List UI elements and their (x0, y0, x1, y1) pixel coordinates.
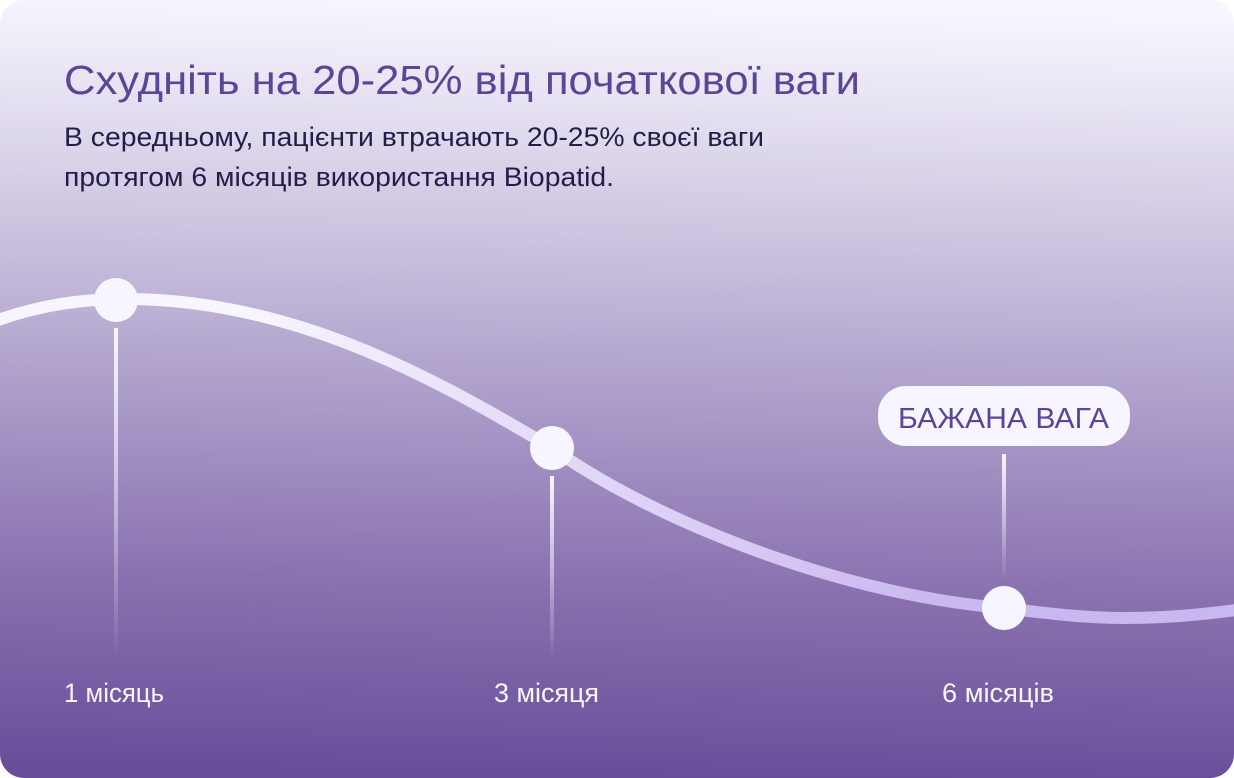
marker: 1 month (94, 278, 138, 322)
text block: description (64, 122, 764, 192)
label: 1 month: 1 місяць (64, 678, 164, 708)
text block: description: протягом 6 місяців використання Biopatid. (64, 162, 614, 192)
connector: 1 month (114, 328, 118, 660)
connector: 3 months (550, 476, 554, 660)
label: 6 months: 6 місяців (942, 678, 1054, 708)
title: Схудніть на 20-25% від початкової ваги (64, 57, 860, 103)
marker: 6 months (982, 586, 1026, 630)
connector: 6 months (1002, 454, 1006, 580)
label: 3 months: 3 місяця (494, 678, 599, 708)
text block: description: В середньому, пацієнти втрачають 20-25% своєї ваги (64, 122, 764, 152)
callout: desired weight: БАЖАНА ВАГА (898, 403, 1110, 435)
marker: 3 months (530, 426, 574, 470)
line chart: weight curve (0, 299, 1234, 618)
callout: desired weight (878, 386, 1130, 446)
